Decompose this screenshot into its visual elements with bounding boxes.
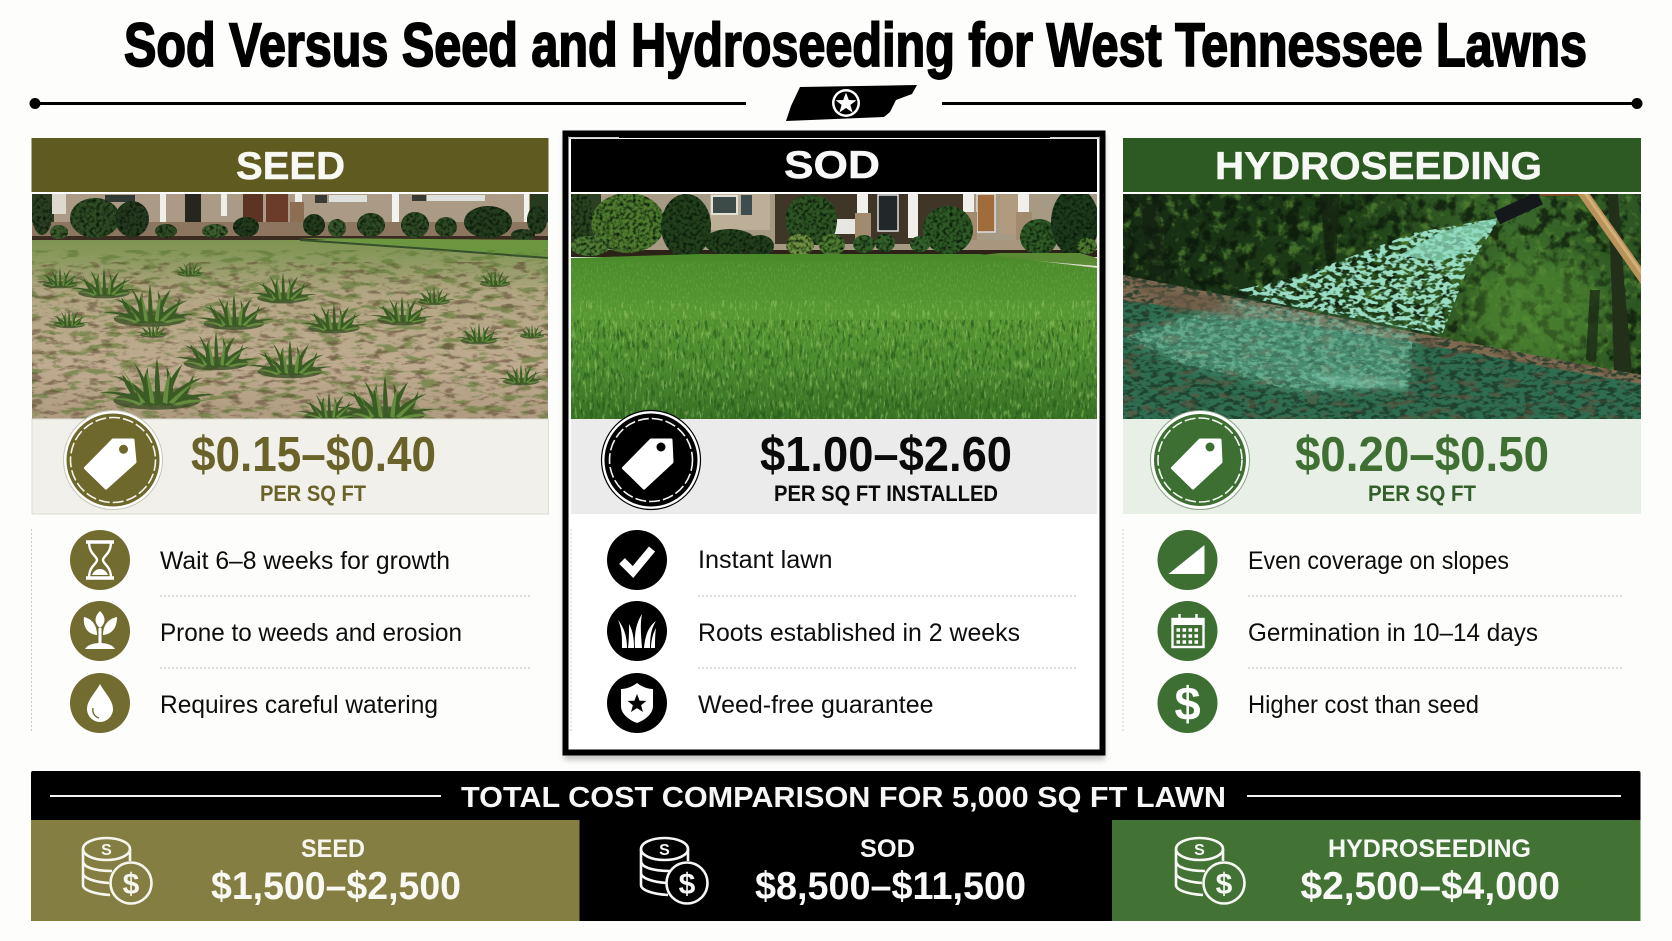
- hydroseeding list: [1123, 529, 1622, 733]
- title divider with Tennessee emblem: [30, 85, 1642, 121]
- icon: check mark: [607, 530, 667, 590]
- comparison heading: TOTAL COST COMPARISON FOR 5,000 SQ FT LAWN: [461, 782, 1226, 814]
- sod total: $8,500–$11,500: [755, 865, 1026, 908]
- hydroseeding price band: [1123, 410, 1641, 514]
- icon: seed price tag badge: [64, 410, 162, 510]
- seed price band: [32, 410, 548, 514]
- icon: water drop: [70, 673, 130, 733]
- seed list: [32, 529, 531, 733]
- panel: sod (highlighted): [564, 131, 1105, 760]
- icon: coins: $: [679, 868, 696, 901]
- hydroseeding price unit: PER SQ FT: [1368, 481, 1477, 506]
- photo: lush new sod lawn in front of house: [568, 185, 1099, 420]
- sod panel frame: [566, 134, 1102, 752]
- sod price band: [571, 410, 1097, 514]
- icon: grass: [607, 601, 667, 661]
- hydroseeding label: HYDROSEEDING: [1328, 835, 1531, 863]
- text: weed free: Weed-free guarantee: [698, 691, 934, 719]
- icon: coins: $: [123, 868, 140, 901]
- text: germination: Germination in 10–14 days: [1248, 619, 1538, 647]
- cost cell: seed: [31, 820, 580, 921]
- text: wait: Wait 6–8 weeks for growth: [160, 547, 450, 575]
- icon: coins: S: [1194, 842, 1205, 859]
- seed label: SEED: [301, 835, 365, 863]
- icon: hydroseeding price tag badge: [1150, 410, 1250, 510]
- icon: coins: [1176, 838, 1244, 904]
- icon: Tennessee state silhouette with star: [786, 85, 917, 121]
- hydroseeding total: $2,500–$4,000: [1300, 865, 1560, 908]
- seed header: SEED: [236, 145, 345, 188]
- cost cell: hydroseeding: [1112, 820, 1640, 921]
- sod label: SOD: [860, 835, 915, 863]
- icon: calendar: [1158, 601, 1218, 661]
- icon: coins: [83, 838, 152, 904]
- panel: total cost comparison: [31, 771, 1640, 921]
- icon: coins: S: [659, 842, 670, 859]
- icon: coins: $: [1216, 868, 1233, 901]
- sod price unit: PER SQ FT INSTALLED: [774, 481, 998, 506]
- panel: seed: [32, 138, 548, 733]
- text: higher cost: Higher cost than seed: [1248, 691, 1479, 719]
- seed price unit: PER SQ FT: [260, 481, 367, 506]
- seed price: $0.15–$0.40: [191, 428, 436, 482]
- icon: plant: [70, 601, 130, 661]
- text: roots: Roots established in 2 weeks: [698, 619, 1020, 647]
- icon: dollar: [1158, 673, 1218, 733]
- sod header: [569, 131, 1099, 192]
- text: instant: Instant lawn: [698, 546, 832, 574]
- icon: coins: S: [101, 842, 112, 859]
- icon: slope: [1158, 530, 1218, 590]
- icon: coins: [641, 838, 708, 904]
- seed total: $1,500–$2,500: [211, 865, 461, 908]
- icon: hourglass: [70, 530, 130, 590]
- sod price: $1.00–$2.60: [760, 428, 1012, 482]
- text: prone: Prone to weeds and erosion: [160, 619, 462, 647]
- hydroseeding price: $0.20–$0.50: [1295, 428, 1549, 482]
- icon: sod price tag badge: [602, 410, 700, 510]
- sod panel shadow: [564, 134, 1105, 760]
- hydroseeding header: [1123, 138, 1641, 192]
- photo: patchy seeded lawn in front of house: [32, 194, 548, 423]
- panel: hydroseeding: [1123, 138, 1645, 733]
- sod list: [571, 529, 1077, 733]
- text: even coverage: Even coverage on slopes: [1248, 547, 1509, 575]
- icon: dollar: $: [1174, 677, 1201, 730]
- icon: shield with star: [607, 673, 667, 733]
- comparison bar background: [31, 771, 1640, 921]
- cost cell: sod: [641, 835, 1026, 908]
- sod header: SOD: [784, 144, 880, 187]
- hydroseeding header: HYDROSEEDING: [1215, 145, 1542, 188]
- seed header: [32, 138, 548, 192]
- photo: hydroseed spray over slope: [1123, 190, 1645, 420]
- text: watering: Requires careful watering: [160, 691, 438, 719]
